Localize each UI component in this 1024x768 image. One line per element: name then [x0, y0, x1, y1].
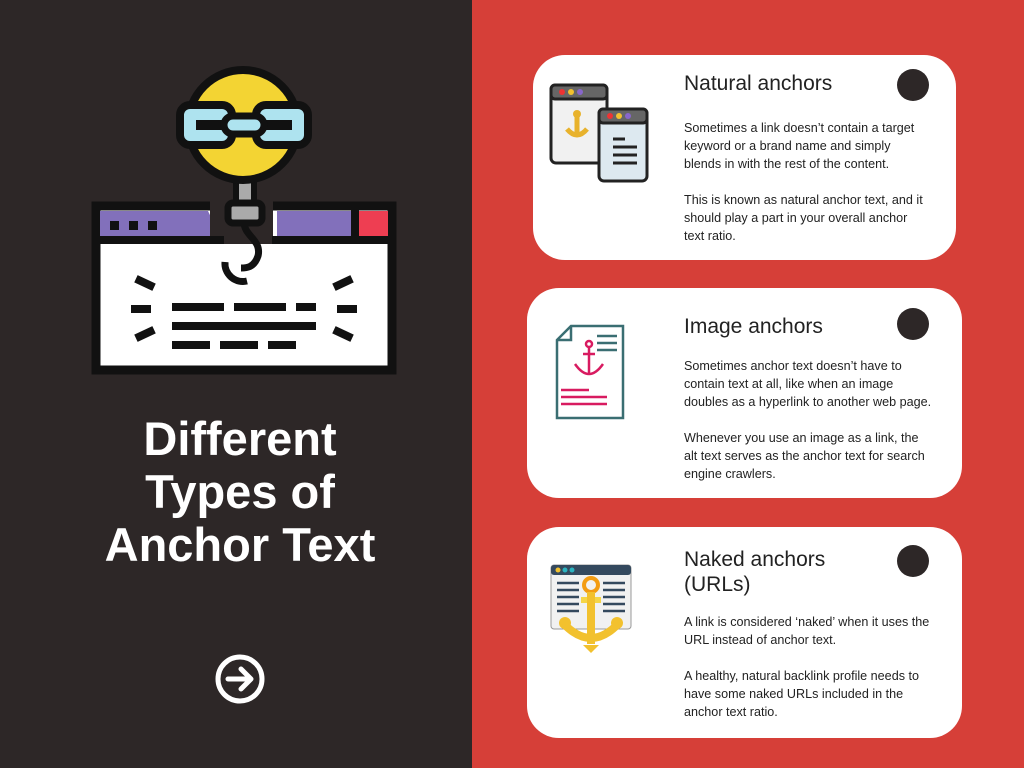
- heading: Natural anchors: [684, 72, 832, 95]
- dot: [897, 69, 929, 101]
- icon: webpage with anchor: [550, 564, 632, 653]
- panel: natural anchors: [533, 55, 956, 260]
- heading: [684, 548, 825, 596]
- heading: Image anchors: [684, 315, 823, 338]
- text: URL instead of anchor text.: [684, 633, 836, 647]
- title: [105, 412, 375, 571]
- text: This is known as natural anchor text, and it: [684, 193, 923, 207]
- text: A link is considered ‘naked’ when it uses the: [684, 615, 929, 629]
- panel: image anchors: [527, 288, 962, 498]
- dot: [897, 545, 929, 577]
- title: Anchor Text: [105, 518, 375, 571]
- browser window: [96, 200, 392, 370]
- dot: [897, 308, 929, 340]
- text: [684, 359, 931, 481]
- text: keyword or a brand name and simply: [684, 139, 890, 153]
- icon: browser windows with anchor: [550, 84, 648, 182]
- text: [684, 615, 929, 719]
- text: should play a part in your overall anchor: [684, 211, 907, 225]
- text: contain text at all, like when an image: [684, 377, 893, 391]
- text: blends in with the rest of the content.: [684, 157, 889, 171]
- title: Types of: [145, 465, 335, 518]
- heading: Naked anchors: [684, 548, 825, 571]
- text: Sometimes anchor text doesn’t have to: [684, 359, 902, 373]
- text: Whenever you use an image as a link, the: [684, 431, 919, 445]
- icon: arrow button: [216, 654, 264, 704]
- text: anchor text ratio.: [684, 705, 778, 719]
- hero illustration: browser with link hook: [92, 66, 396, 374]
- text: alt text serves as the anchor text for search: [684, 449, 925, 463]
- heading: (URLs): [684, 573, 750, 596]
- text: A healthy, natural backlink profile needs to: [684, 669, 919, 683]
- icon: link circle with hook: [180, 70, 308, 281]
- icon: document with anchor: [556, 324, 624, 420]
- left panel: [0, 0, 472, 768]
- panel: naked anchors: [527, 527, 962, 738]
- text: have some naked URLs included in the: [684, 687, 903, 701]
- text: doubles as a hyperlink to another web page.: [684, 395, 931, 409]
- text: [684, 121, 923, 243]
- text: engine crawlers.: [684, 467, 776, 481]
- title: Different: [143, 412, 337, 465]
- text: Sometimes a link doesn’t contain a target: [684, 121, 914, 135]
- text: text ratio.: [684, 229, 736, 243]
